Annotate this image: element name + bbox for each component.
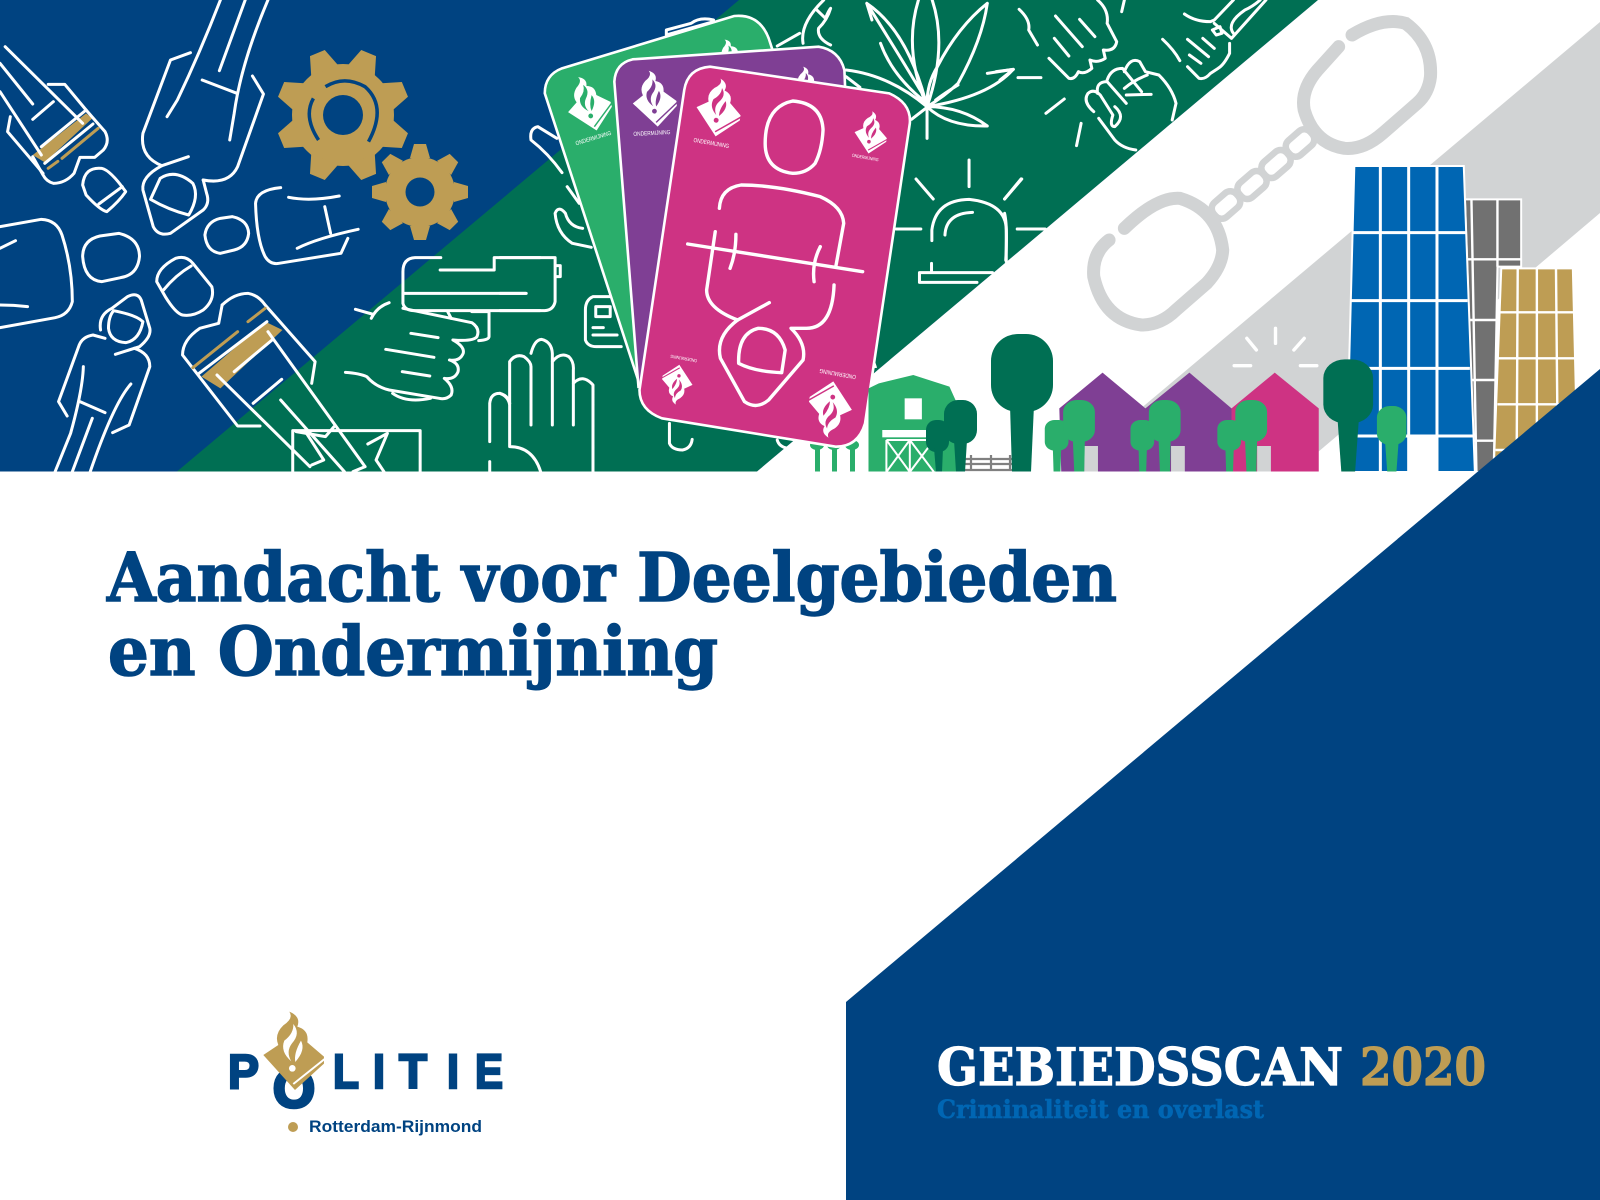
report name: Criminaliteit en overlast bbox=[937, 1095, 1264, 1124]
police logo bbox=[228, 1012, 503, 1136]
light rays bbox=[1234, 328, 1317, 366]
fence bbox=[965, 455, 1013, 471]
officer top centre bbox=[142, 0, 268, 234]
officer left bbox=[0, 219, 139, 328]
card: magenta: ONDERMIJNING bbox=[693, 138, 730, 150]
card: green: ONDERMIJNING bbox=[575, 131, 613, 147]
siren bbox=[896, 160, 1040, 282]
header illustration band bbox=[0, 0, 1600, 472]
blue tower bbox=[1346, 166, 1475, 472]
leaf tip and siren rays bbox=[996, 69, 1045, 260]
line art: gun end, hand, keyboard, leaf and siren bbox=[500, 0, 1040, 472]
barn bbox=[868, 375, 961, 472]
buildings bbox=[1346, 166, 1578, 472]
line art: fists and knife bbox=[996, 0, 1266, 260]
gun barrel end bbox=[500, 258, 560, 311]
grey tower bbox=[1465, 199, 1521, 472]
wordmark: E bbox=[475, 1046, 503, 1099]
hand with knife bbox=[1163, 0, 1266, 79]
card: green bbox=[545, 16, 875, 400]
lower cuff bbox=[1094, 198, 1223, 325]
region name: Rotterdam-Rijnmond bbox=[309, 1117, 482, 1136]
raised hand bbox=[500, 339, 593, 472]
officer lower right bbox=[157, 257, 365, 472]
card: magenta: ONDERMIJNING bbox=[670, 354, 697, 363]
navy corner panel bbox=[846, 369, 1600, 1200]
envelope bbox=[293, 427, 420, 472]
top fist bbox=[1019, 0, 1124, 79]
gold tower bbox=[1494, 268, 1578, 472]
chain bbox=[1208, 126, 1318, 222]
report name: 2020 bbox=[1360, 1038, 1486, 1098]
line art: five officers in a huddle bbox=[0, 0, 540, 472]
report name bbox=[937, 1038, 1486, 1124]
title: en Ondermijning bbox=[108, 612, 718, 691]
grey diagonal band bbox=[1144, 22, 1600, 452]
house trees bbox=[1045, 400, 1267, 472]
lower fist bbox=[1046, 60, 1176, 150]
officer top left bbox=[0, 47, 126, 212]
gears bbox=[276, 48, 468, 240]
wordmark: L bbox=[333, 1046, 359, 1099]
title: Aandacht voor Deelgebieden bbox=[106, 538, 1117, 617]
houses bbox=[1045, 373, 1319, 472]
card: magenta: ONDERMIJNING bbox=[852, 153, 879, 162]
upper cuff bbox=[1304, 22, 1431, 148]
logo emblem bbox=[263, 1012, 325, 1090]
report name: GEBIEDSSCAN bbox=[937, 1038, 1343, 1098]
gold dot bbox=[288, 1122, 298, 1132]
objects behind the cards bbox=[531, 19, 788, 450]
card: magenta: ONDERMIJNING bbox=[819, 367, 857, 379]
green diagonal band bbox=[177, 0, 1318, 472]
wordmark: O bbox=[273, 1059, 315, 1119]
trees by the tower bbox=[1323, 359, 1406, 472]
wordmark: T bbox=[399, 1046, 427, 1099]
white diagonal band bbox=[757, 0, 1600, 472]
card: purple bbox=[614, 47, 845, 387]
small village trees bbox=[810, 440, 859, 472]
keyboard bbox=[585, 297, 621, 347]
card: magenta bbox=[639, 67, 910, 447]
arm top bbox=[777, 0, 831, 46]
wordmark bbox=[228, 1046, 503, 1119]
dark green trees bbox=[926, 334, 1053, 472]
officer right bbox=[205, 188, 358, 264]
card: purple: ONDERMIJNING bbox=[633, 130, 671, 138]
officer bottom bbox=[55, 295, 150, 472]
title bbox=[106, 538, 1117, 691]
wordmark: I bbox=[447, 1046, 459, 1099]
cannabis leaf bbox=[846, 0, 1013, 138]
hand with gun bbox=[345, 258, 540, 472]
officer figure on card bbox=[688, 101, 863, 405]
wordmark: I bbox=[373, 1046, 385, 1099]
wordmark: P bbox=[228, 1046, 259, 1099]
handcuffs bbox=[1094, 22, 1431, 325]
small gear bbox=[372, 144, 468, 240]
large gear bbox=[276, 48, 410, 182]
navy background bbox=[0, 0, 1318, 472]
